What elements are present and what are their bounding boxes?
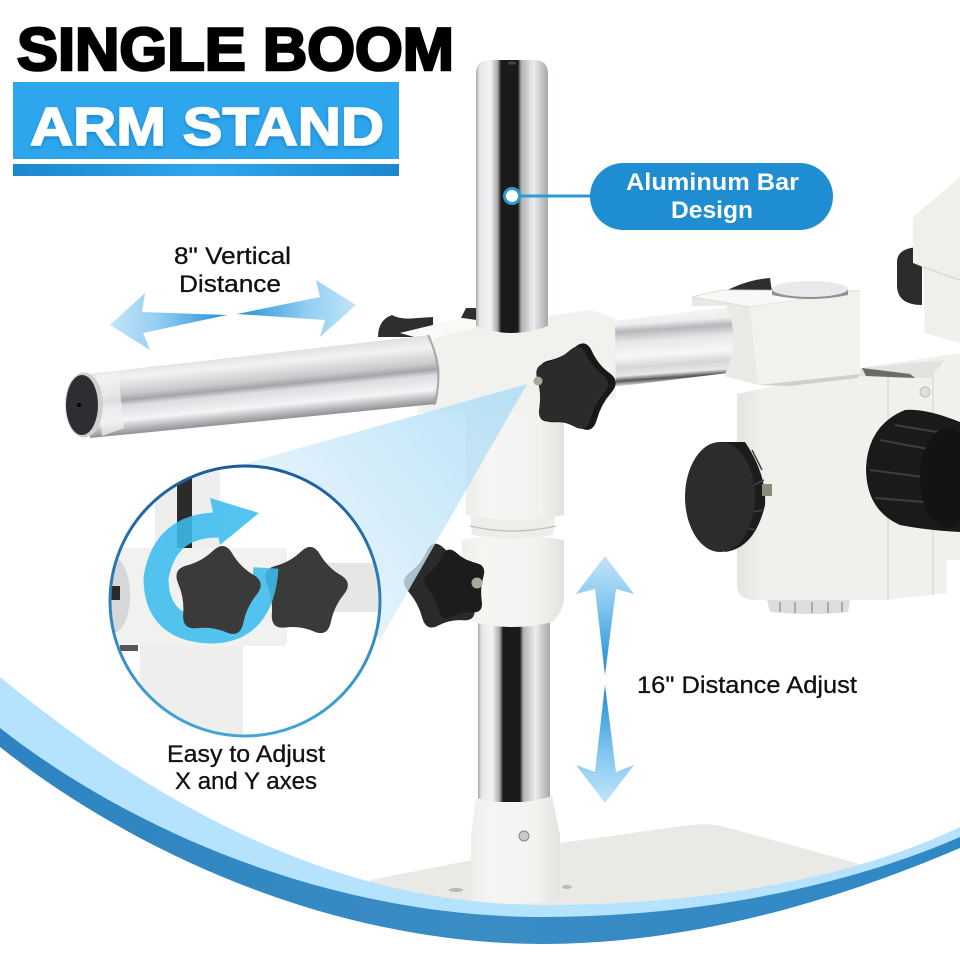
boom end cap bbox=[65, 372, 103, 438]
swoosh dark band bbox=[0, 728, 960, 960]
magnifier ring bbox=[110, 466, 380, 736]
collar and central column bbox=[462, 390, 564, 627]
banner text: ARM STAND bbox=[30, 97, 384, 157]
callout leader and dot bbox=[504, 188, 592, 204]
lower vertical chrome bar bbox=[478, 620, 550, 802]
label: easy to adjust bbox=[167, 741, 325, 795]
label: easy to adjust: Easy to Adjust bbox=[167, 741, 325, 768]
upper vertical aluminum bar bbox=[476, 60, 548, 333]
rotation arrow bbox=[156, 498, 266, 631]
callout pill: Aluminum Bar bbox=[626, 169, 799, 196]
bar top cap dot bbox=[508, 61, 516, 65]
lower left knob bbox=[397, 536, 492, 631]
label: 8 inch vertical distance bbox=[174, 243, 291, 298]
right horizontal bar bbox=[606, 307, 738, 388]
label: easy to adjust: X and Y axes bbox=[175, 768, 317, 795]
vertical double arrow bbox=[576, 556, 634, 803]
horizontal double arrow bbox=[110, 280, 356, 350]
rear small knobs bbox=[378, 278, 772, 337]
large focus knob bbox=[866, 410, 960, 532]
focus side knob bbox=[685, 442, 772, 552]
area below swoosh bbox=[0, 747, 960, 960]
title banner bbox=[13, 82, 399, 176]
right clamp block bbox=[692, 281, 860, 386]
upper knob bbox=[527, 335, 623, 434]
callout pill bbox=[590, 163, 833, 230]
label: 16 inch distance adjust: 16" Distance Adjust bbox=[637, 672, 857, 699]
callout pill: Design bbox=[671, 197, 753, 224]
right focus body bbox=[737, 354, 960, 614]
first knob bbox=[169, 540, 265, 637]
chrome disc bbox=[772, 281, 848, 299]
second knob bbox=[258, 541, 353, 636]
base collar bbox=[449, 796, 572, 904]
swoosh light band bbox=[0, 677, 960, 960]
label: 8 inch vertical distance: 8" Vertical bbox=[174, 243, 291, 270]
microscope head top right bbox=[897, 177, 960, 343]
left boom tube bbox=[88, 335, 440, 438]
magnifier detail circle bbox=[96, 460, 380, 740]
cross block bbox=[400, 310, 616, 413]
magnified stand photo bbox=[112, 470, 378, 734]
cone from knob to magnifier bbox=[240, 384, 527, 640]
base plate bbox=[370, 824, 860, 930]
label: 8 inch vertical distance: Distance bbox=[179, 271, 281, 298]
title line 1: SINGLE BOOM bbox=[17, 16, 454, 83]
